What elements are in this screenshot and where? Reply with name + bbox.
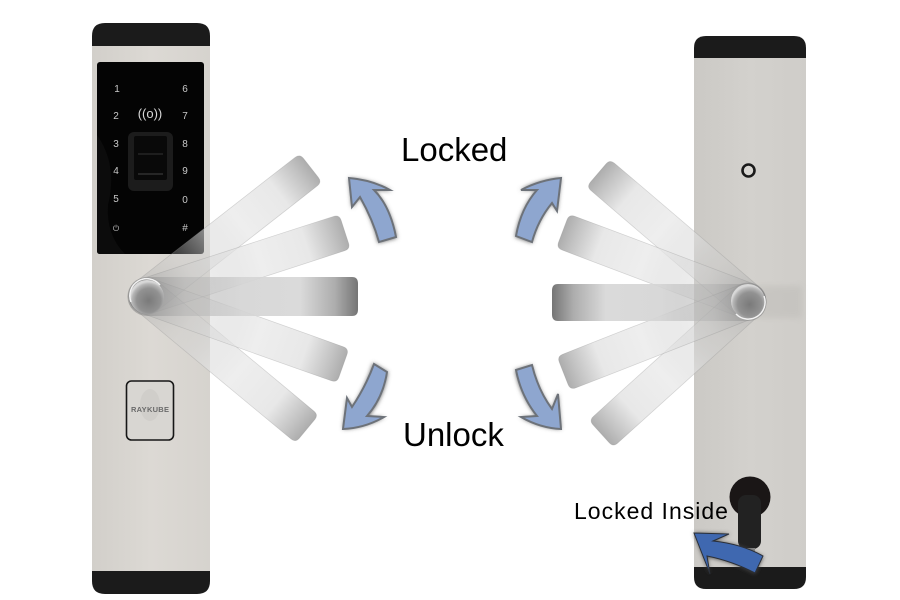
keypad digits: 8: [182, 139, 188, 150]
handle position: up: [124, 215, 350, 319]
left lock panel: [92, 23, 210, 594]
left top cap: [92, 23, 210, 46]
handle shadow on plate: [750, 286, 802, 318]
screen reflection: [97, 135, 125, 254]
keypad digits: 1: [114, 84, 120, 95]
label: Locked: Locked: [401, 131, 507, 168]
handle position: down: [124, 273, 349, 383]
keypad digits: 9: [182, 166, 188, 177]
arrow: locked inside: [694, 533, 763, 575]
label: Locked Inside: Locked Inside: [574, 498, 729, 524]
right handle fan: [552, 159, 773, 447]
right top cap: [694, 36, 806, 58]
brand card button: [126, 381, 174, 440]
arrow: right down: [515, 365, 561, 429]
handle position: level: [552, 284, 766, 321]
left handle fan: [122, 154, 358, 443]
keypad digits: 2: [113, 111, 119, 122]
keypad digits: 4: [113, 166, 119, 177]
left steel plate: [92, 46, 210, 571]
right handle pivot: [731, 284, 765, 319]
keypad digits: 5: [113, 194, 119, 205]
left handle pivot: [130, 279, 164, 314]
handle position: up high: [587, 159, 773, 326]
keypad screen: [97, 62, 204, 254]
right lock panel: [694, 36, 806, 589]
handle position: down high: [122, 271, 319, 443]
handle position: down high: [589, 276, 773, 447]
handle position: up: [556, 214, 771, 324]
keypad digits: #: [182, 223, 188, 234]
sensor hole: [742, 164, 754, 176]
handle position: up high: [122, 154, 322, 321]
keypad digits: [113, 84, 188, 234]
keypad digits: ⏻: [113, 224, 120, 233]
arrow: left down: [343, 363, 388, 429]
handle position: down: [557, 278, 771, 390]
handle position: level: [128, 277, 358, 316]
keypad digits: 3: [113, 139, 119, 150]
inner thumb turn: [730, 476, 770, 554]
keypad digits: 7: [182, 111, 188, 122]
fingerprint module: [128, 132, 173, 191]
icon: NFC: ((o)): [138, 106, 162, 121]
brand card button: RAYKUBE: [131, 405, 169, 414]
label: Unlock: Unlock: [403, 416, 504, 453]
arrow: right up: [515, 178, 561, 243]
right steel plate: [694, 58, 806, 567]
right bottom cap: [694, 567, 806, 589]
keypad digits: 6: [182, 84, 188, 95]
arrow: left up: [349, 178, 397, 243]
left bottom cap: [92, 571, 210, 594]
keypad digits: 0: [182, 195, 188, 206]
